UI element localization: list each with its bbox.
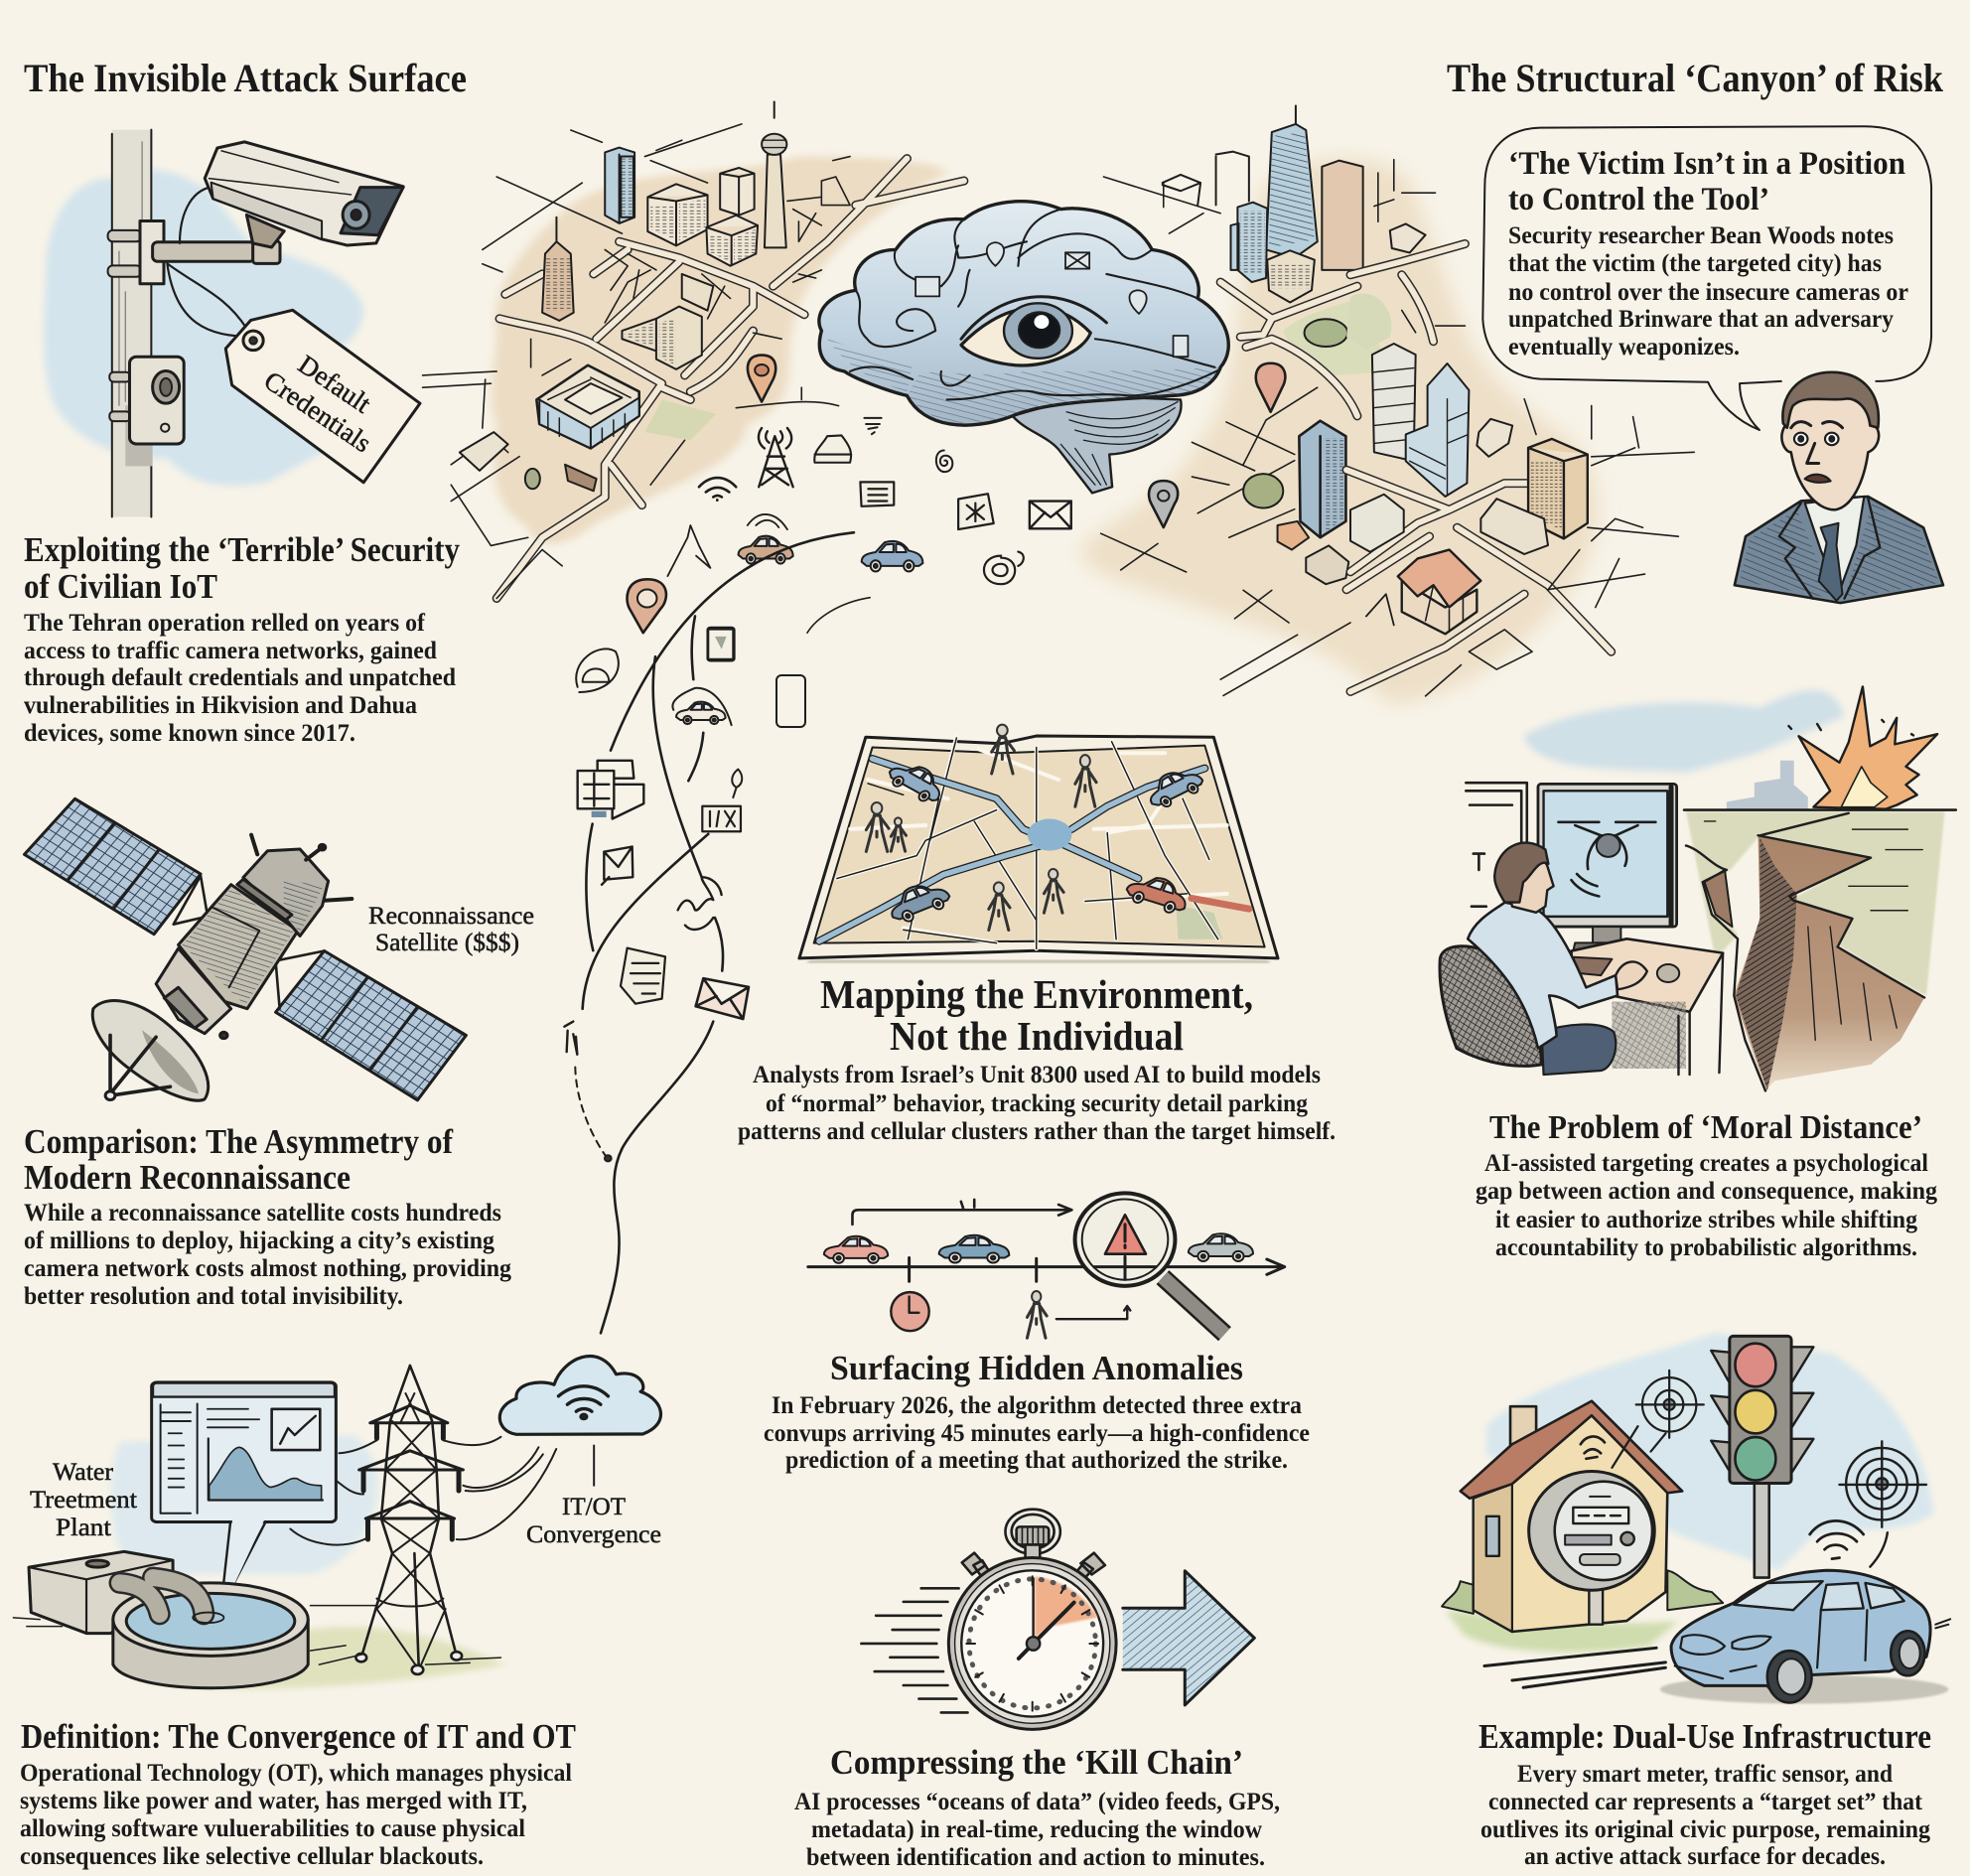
brown building bbox=[565, 465, 597, 491]
body: systems like power and water, has merged with IT, bbox=[20, 1788, 527, 1814]
bubble heading: to Control the Tool’ bbox=[1508, 182, 1769, 217]
thin street lines bbox=[423, 124, 850, 598]
bubble body bbox=[1508, 222, 1908, 361]
house bbox=[1461, 1401, 1682, 1632]
icon: car outline bbox=[814, 435, 851, 463]
explosion bbox=[1788, 686, 1937, 809]
body: In February 2026, the algorithm detected three extra bbox=[772, 1392, 1302, 1419]
park bbox=[644, 399, 716, 440]
desk bbox=[1571, 938, 1723, 1012]
body: accountability to probabilistic algorithms. bbox=[1495, 1234, 1917, 1261]
body: gap between action and consequence, making bbox=[1476, 1178, 1937, 1205]
icon: cell tower bbox=[759, 428, 793, 487]
brain stem and cerebellum bbox=[1013, 395, 1182, 493]
text block: Example Dual-Use Infrastructure bbox=[1478, 1717, 1931, 1870]
text block: Compressing the Kill Chain bbox=[794, 1743, 1280, 1871]
connected car bbox=[1660, 1570, 1950, 1704]
label: Water Treetment Plant: Plant bbox=[56, 1515, 111, 1541]
illustration: stopwatch with speed arrow bbox=[861, 1510, 1254, 1729]
body: metadata) in real-time, reducing the window bbox=[811, 1816, 1262, 1843]
label: IT/OT Convergence bbox=[526, 1494, 661, 1548]
body: between identification and action to minutes. bbox=[806, 1844, 1265, 1871]
body: of millions to deploy, hijacking a city’s existing bbox=[24, 1227, 494, 1254]
icon: glyph card bbox=[958, 494, 994, 529]
head bbox=[1504, 851, 1554, 913]
icon: wifi above car bbox=[748, 514, 787, 529]
body: vulnerabilities in Hikvision and Dahua bbox=[24, 692, 417, 719]
treatment box bbox=[29, 1551, 173, 1634]
wifi above car bbox=[1810, 1520, 1864, 1559]
body: access to traffic camera networks, gained bbox=[24, 638, 437, 664]
clock bbox=[891, 1292, 929, 1331]
body: AI-assisted targeting creates a psychological bbox=[1484, 1150, 1928, 1177]
label: IT/OT Convergence: IT/OT bbox=[562, 1494, 626, 1520]
icon: phone bbox=[776, 675, 805, 727]
pole bbox=[112, 130, 153, 516]
grass marks bbox=[13, 1606, 500, 1664]
heading: Exploiting the ‘Terrible’ Security bbox=[24, 530, 460, 569]
small houses bbox=[460, 432, 508, 471]
body: devices, some known since 2017. bbox=[24, 720, 355, 747]
icon: data card bbox=[860, 482, 894, 506]
icon: small bracket bbox=[708, 630, 733, 659]
canyon rock bbox=[1734, 835, 1924, 1090]
left monitor bbox=[1466, 783, 1527, 935]
body: connected car represents a “target set” that bbox=[1488, 1789, 1923, 1815]
body bbox=[1476, 1150, 1937, 1261]
hand bbox=[1616, 961, 1647, 989]
blue tower bbox=[605, 148, 634, 223]
main monitor bbox=[1538, 784, 1677, 951]
body: better resolution and total invisibility. bbox=[24, 1283, 403, 1310]
icon: small mail bbox=[602, 847, 633, 885]
icon: envelope bbox=[1030, 502, 1071, 528]
body: patterns and cellular clusters rather than the target himself. bbox=[738, 1118, 1336, 1145]
hand bbox=[1019, 1603, 1074, 1659]
hair bbox=[1782, 372, 1879, 428]
city silhouette bbox=[1727, 761, 1808, 809]
bushes bbox=[1442, 1570, 1723, 1614]
tan buildings bbox=[647, 184, 708, 245]
illustration: worried man in suit bbox=[1735, 372, 1943, 603]
data icons drifting from the brain bbox=[628, 418, 1071, 660]
body: outlives its original civic purpose, remaining bbox=[1480, 1816, 1930, 1843]
blue routes bbox=[819, 759, 1204, 941]
pencil shading bbox=[827, 339, 1220, 423]
body: Operational Technology (OT), which manages physical bbox=[20, 1760, 572, 1787]
water tank bbox=[113, 1578, 308, 1688]
icon: squiggle bbox=[678, 877, 722, 930]
mid block bbox=[622, 274, 713, 369]
satellite body bbox=[156, 835, 352, 1039]
case bbox=[948, 1558, 1116, 1729]
drone on monitor bbox=[1558, 822, 1655, 896]
connector bbox=[593, 1446, 595, 1486]
suit bbox=[1735, 497, 1943, 603]
wires bbox=[167, 187, 251, 337]
side buttons bbox=[962, 1553, 1105, 1580]
illustration: security camera with default credentials tag bbox=[44, 130, 420, 516]
heading bbox=[24, 530, 460, 606]
body bbox=[738, 1062, 1336, 1145]
heading: The Problem of ‘Moral Distance’ bbox=[1489, 1109, 1922, 1146]
dash end marker bbox=[605, 1155, 612, 1161]
body: While a reconnaissance satellite costs hundreds bbox=[24, 1200, 501, 1227]
sensor box bbox=[109, 357, 184, 444]
body: Analysts from Israel’s Unit 8300 used AI to build models bbox=[753, 1062, 1321, 1088]
body bbox=[794, 1789, 1280, 1871]
tag label: Default Credentials: Credentials bbox=[259, 365, 376, 458]
body: prediction of a meeting that authorized the strike. bbox=[785, 1447, 1288, 1474]
text block: Comparison bbox=[24, 1122, 511, 1310]
brain folds bbox=[850, 210, 1220, 399]
road lines bbox=[1484, 1648, 1665, 1687]
map streets bbox=[837, 736, 1227, 948]
skyscraper bbox=[542, 217, 574, 321]
cliff edges bbox=[1686, 813, 1924, 1090]
heading bbox=[820, 971, 1253, 1059]
body: The Tehran operation relled on years of bbox=[24, 610, 426, 637]
icon: bolt mark bbox=[564, 1022, 577, 1055]
text block: Definition bbox=[20, 1717, 576, 1870]
tan wash bbox=[1081, 158, 1599, 705]
speed lines bbox=[861, 1588, 968, 1712]
pedestrian bbox=[1027, 1291, 1047, 1338]
heading: Not the Individual bbox=[890, 1013, 1184, 1059]
map shadow bbox=[806, 960, 1271, 963]
label: Water Treetment Plant: Water bbox=[53, 1459, 114, 1486]
label: Water Treetment Plant bbox=[30, 1459, 137, 1541]
icon: envelope bbox=[696, 978, 749, 1019]
body: of “normal” behavior, tracking security detail parking bbox=[766, 1090, 1308, 1117]
dashboard window bbox=[152, 1382, 336, 1609]
brain icons bbox=[915, 242, 1188, 357]
sky wash bbox=[44, 170, 363, 486]
bubble body: eventually weaponizes. bbox=[1508, 334, 1740, 361]
features bbox=[1791, 421, 1843, 483]
tan wash bbox=[492, 157, 947, 544]
body: through default credentials and unpatched bbox=[24, 664, 456, 691]
heading: The Invisible Attack Surface: The Invisible Attack Surface bbox=[24, 56, 467, 100]
bracket bbox=[108, 215, 284, 284]
bubble body: that the victim (the targeted city) has bbox=[1508, 250, 1882, 277]
icon: document cluster bbox=[578, 761, 643, 818]
body: an active attack surface for decades. bbox=[1524, 1843, 1886, 1870]
orange wedge bbox=[1035, 1576, 1097, 1638]
body: it easier to authorize stribes while shifting bbox=[1495, 1207, 1917, 1233]
heading: Surfacing Hidden Anomalies bbox=[830, 1349, 1243, 1387]
illustration: brain with eye bbox=[819, 202, 1228, 493]
icon: blue car bbox=[862, 541, 922, 571]
illustration: satellite bbox=[24, 798, 466, 1100]
cloud with wifi bbox=[499, 1357, 660, 1434]
icon: map pin bbox=[628, 579, 666, 633]
body: convups arriving 45 minutes early—a high-confidence bbox=[764, 1420, 1310, 1447]
curved flow paths bbox=[583, 532, 854, 1333]
heading: Mapping the Environment, bbox=[820, 971, 1253, 1017]
text block: Exploiting the Terrible Security bbox=[24, 530, 460, 747]
right city west half bbox=[807, 106, 1391, 695]
body: camera network costs almost nothing, providing bbox=[24, 1255, 511, 1282]
heading bbox=[24, 1122, 453, 1197]
illustration: map with cars and pedestrians bbox=[799, 725, 1278, 963]
icon: leaf bbox=[732, 769, 742, 797]
cars on timeline bbox=[824, 1233, 1253, 1263]
body: AI processes “oceans of data” (video feeds, GPS, bbox=[794, 1789, 1280, 1815]
text block: The Problem of Moral Distance bbox=[1476, 1109, 1937, 1261]
tag shape bbox=[225, 310, 420, 483]
tag label: Default Credentials: Default bbox=[293, 349, 376, 419]
icon: small mountain bbox=[667, 525, 710, 576]
magnifier handle bbox=[1163, 1277, 1224, 1334]
icon: report bbox=[621, 948, 665, 1004]
icon: signal bbox=[864, 418, 882, 434]
icon: swirl bbox=[936, 451, 952, 472]
icon: glyph sign bbox=[702, 806, 741, 831]
hair bbox=[1494, 843, 1548, 903]
icon: car with cloud bbox=[672, 688, 732, 725]
body: Every smart meter, traffic sensor, and bbox=[1517, 1761, 1893, 1788]
traffic light bbox=[1711, 1336, 1813, 1578]
power lines bbox=[290, 1437, 556, 1545]
solar panel right bbox=[276, 950, 466, 1100]
timeline axis bbox=[808, 1257, 1285, 1281]
heading and text: Mapping the Environment bbox=[738, 971, 1336, 1145]
civic block bbox=[536, 365, 639, 448]
bubble body: unpatched Brinware that an adversary bbox=[1508, 306, 1894, 333]
icon: brown car bbox=[739, 536, 793, 564]
label: IT/OT Convergence: Convergence bbox=[526, 1521, 661, 1548]
illustration: operator at desk and canyon bbox=[1440, 686, 1956, 1090]
speed arrow bbox=[1123, 1571, 1254, 1705]
blue and grass washes bbox=[111, 1435, 377, 1574]
illustration: city map right side bbox=[807, 106, 1694, 705]
dish bbox=[92, 1001, 209, 1100]
body bbox=[24, 1200, 511, 1310]
bubble body: Security researcher Bean Woods notes bbox=[1508, 222, 1894, 249]
tick marks bbox=[966, 1576, 1098, 1711]
horizon bbox=[1684, 808, 1956, 811]
chair bbox=[1440, 946, 1542, 1066]
speech bubble with quote bbox=[1482, 126, 1931, 430]
heading: of Civilian IoT bbox=[24, 567, 217, 606]
data flow lines and icons bbox=[564, 532, 854, 1333]
map sheet bbox=[799, 736, 1278, 958]
body bbox=[1480, 1761, 1930, 1870]
target on car bbox=[1839, 1441, 1926, 1567]
timeline lower elements bbox=[891, 1277, 1224, 1338]
sky wash bbox=[1523, 690, 1845, 773]
grass bbox=[1446, 1610, 1678, 1653]
pin bbox=[748, 356, 775, 402]
illustration: timeline with anomaly magnifier bbox=[808, 1193, 1285, 1286]
heading: Comparison: The Asymmetry of bbox=[24, 1122, 453, 1161]
sky wash bbox=[1486, 1333, 1933, 1570]
satellite label bbox=[368, 903, 534, 956]
magnifier lens bbox=[1075, 1193, 1175, 1286]
target on house bbox=[1612, 1371, 1704, 1468]
heading: Modern Reconnaissance bbox=[24, 1158, 351, 1197]
camera body bbox=[205, 142, 403, 245]
text block: Surfacing Hidden Anomalies bbox=[764, 1349, 1310, 1474]
body bbox=[764, 1392, 1310, 1474]
satellite label: Satellite ($$$) bbox=[375, 930, 519, 956]
smart meter bbox=[1529, 1471, 1654, 1625]
bubble heading bbox=[1508, 146, 1905, 217]
icon: circle doc bbox=[576, 649, 619, 692]
roads bbox=[496, 159, 964, 598]
right city east half bbox=[1346, 160, 1694, 696]
rising arrow bbox=[1056, 1306, 1130, 1319]
label: Water Treetment Plant: Treetment bbox=[30, 1487, 137, 1514]
body: allowing software vuluerabilities to cause physical bbox=[20, 1815, 525, 1842]
torso bbox=[1468, 903, 1618, 1049]
bubble body: no control over the insecure cameras or bbox=[1508, 279, 1908, 306]
cars on map bbox=[883, 756, 1207, 926]
crown bbox=[1005, 1510, 1060, 1559]
illustration: house meter, traffic light and connected car bbox=[1442, 1333, 1950, 1704]
body: consequences like selective cellular blackouts. bbox=[20, 1843, 484, 1870]
pedestrians on map bbox=[866, 725, 1096, 931]
top arrow bbox=[852, 1200, 1071, 1225]
face bbox=[1781, 390, 1879, 509]
solar panel left bbox=[24, 798, 207, 935]
icon: wifi bbox=[699, 478, 736, 501]
pylon bbox=[355, 1366, 463, 1674]
body bbox=[24, 610, 456, 747]
icon: at symbol bbox=[984, 552, 1024, 584]
satellite label: Reconnaissance bbox=[368, 903, 534, 930]
dashed path bbox=[575, 1067, 608, 1158]
drone body bbox=[1597, 834, 1620, 857]
icon: bracket card bbox=[708, 628, 735, 660]
bubble outline bbox=[1482, 126, 1931, 430]
eye bbox=[961, 297, 1106, 365]
lens bbox=[341, 188, 403, 235]
body bbox=[20, 1760, 572, 1870]
brain outline bbox=[819, 202, 1228, 425]
ground and left bank bbox=[1686, 811, 1945, 995]
heading: Compressing the ‘Kill Chain’ bbox=[830, 1743, 1243, 1782]
orange house bbox=[1398, 550, 1480, 634]
illustration: IT/OT water plant, pylon and cloud bbox=[13, 1357, 660, 1688]
bubble heading: ‘The Victim Isn’t in a Position bbox=[1508, 146, 1905, 182]
legs bbox=[1542, 1024, 1616, 1075]
illustration: city map left side bbox=[423, 101, 964, 598]
heading: Definition: The Convergence of IT and OT bbox=[21, 1717, 576, 1756]
communications tower bbox=[765, 101, 786, 247]
